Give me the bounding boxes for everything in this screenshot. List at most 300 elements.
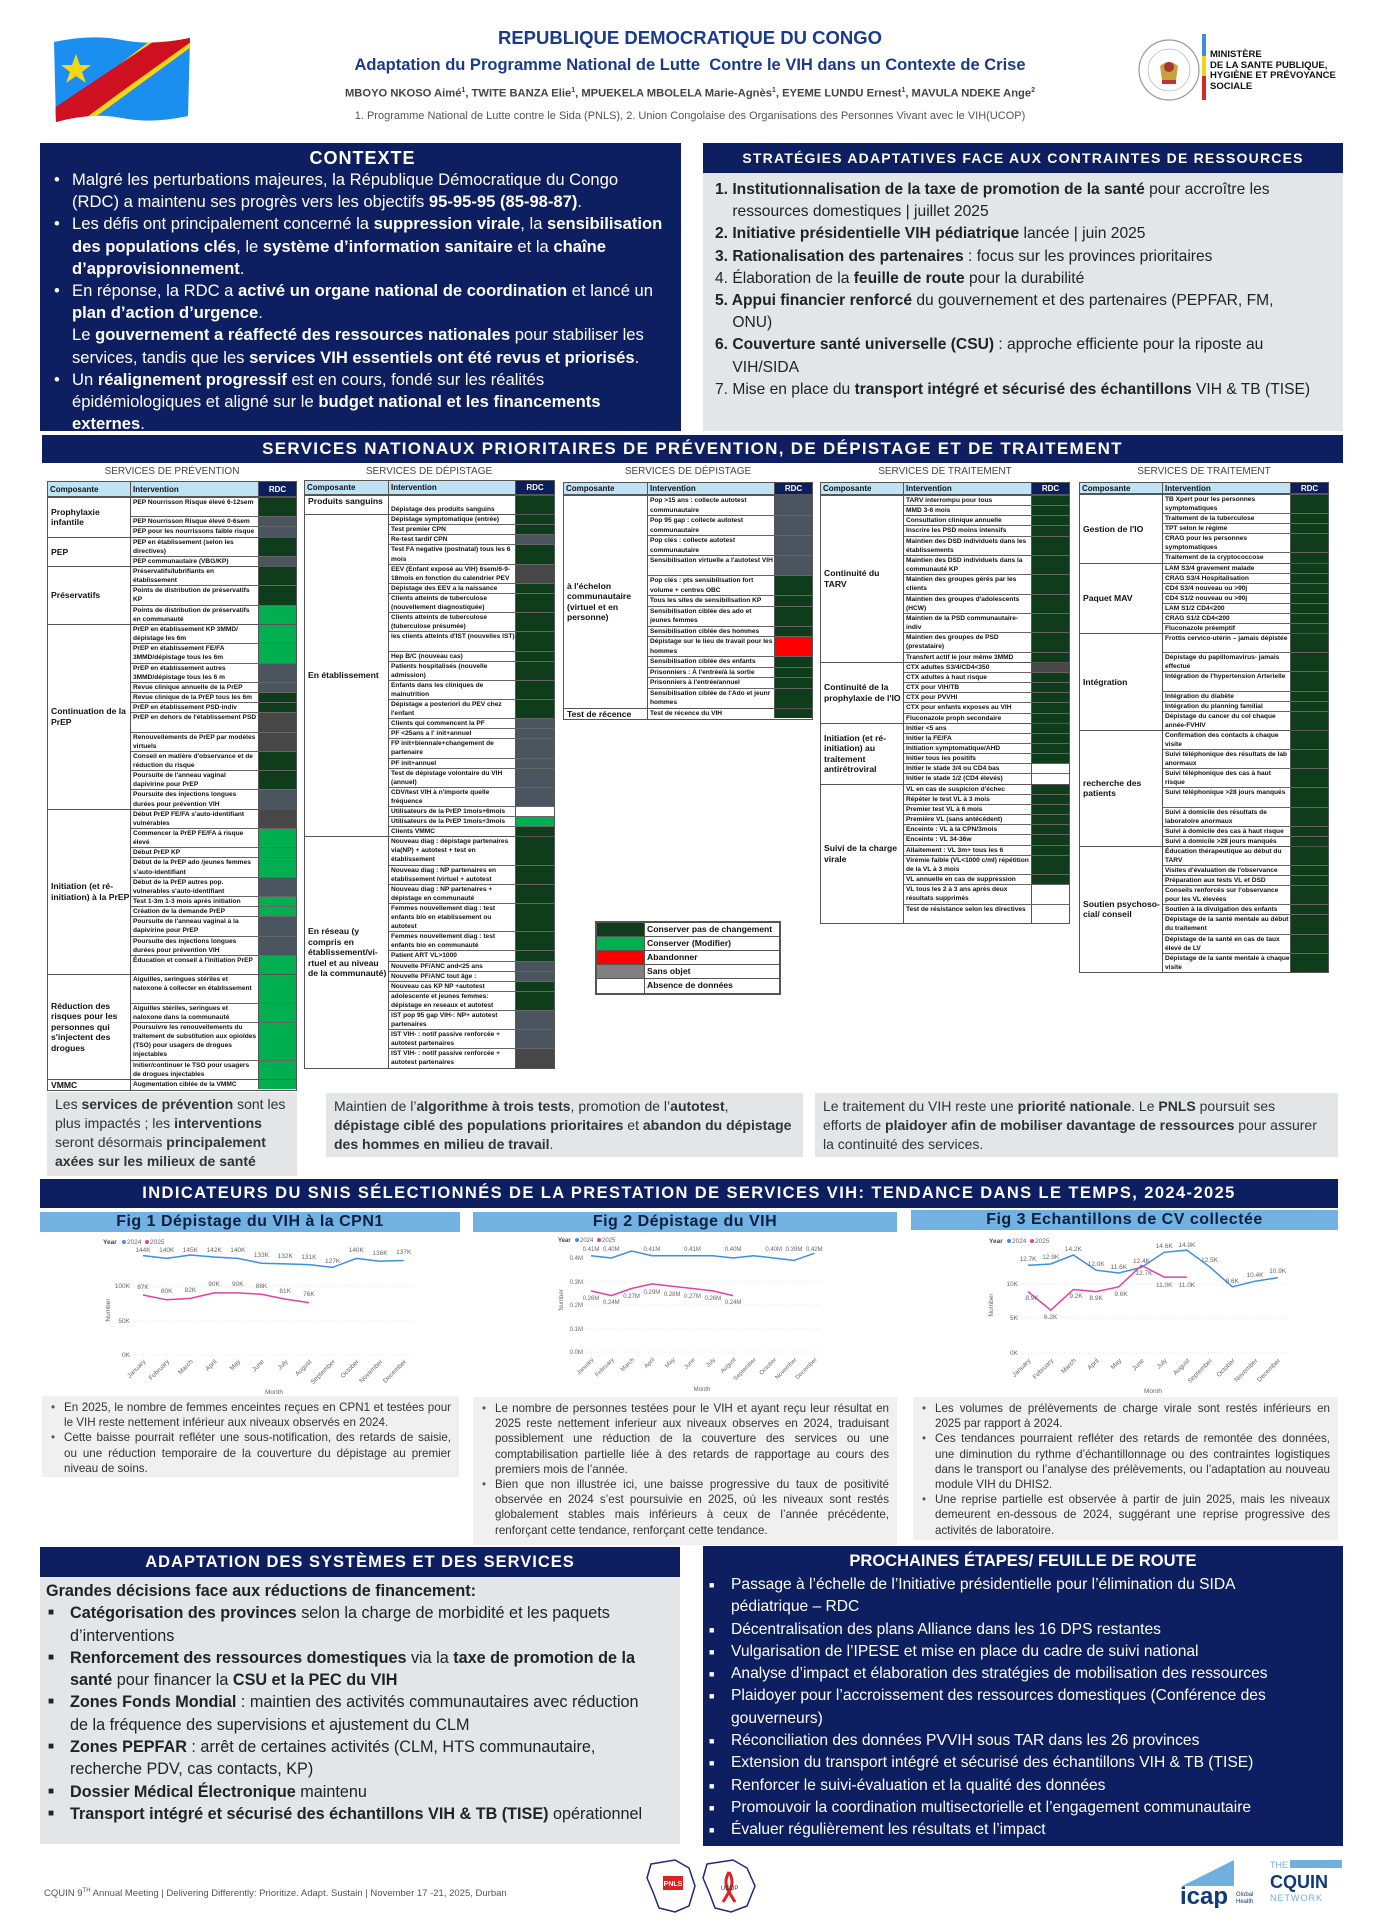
panel: prochaines etapes: ■ <box>709 1781 714 1791</box>
panel: prochaines etapes: ■ <box>709 1825 714 1835</box>
table: depistage 1: PF <25ans a l' init+annuel <box>391 730 471 737</box>
heading: adaptation: ADAPTATION DES SYSTÈMES ET DES SERVICES <box>145 1553 575 1571</box>
table: traitement 2: Suivi à domicile des résultats de laboratoire anormaux <box>1165 808 1267 825</box>
table: traitement 2: TB Xpert pour les personnes symptomatiques <box>1165 496 1255 512</box>
chart: fig 1: Number <box>105 1298 112 1322</box>
table: traitement 2 <box>1079 482 1329 973</box>
text block: fig 3 notes <box>913 1397 1338 1540</box>
table: depistage 1: Clients atteints de tuberculose (nouvellement diagnostiquée) <box>391 595 487 611</box>
table: traitement 1: Enceinte : VL 34-36w <box>906 836 971 843</box>
chart: fig 2: September <box>733 1357 758 1382</box>
table: traitement 1: Virémie faible (VL<1000 c/ml) répétition de la VL à 3 mois <box>906 857 1029 873</box>
chart: fig 3: 2024 <box>1012 1238 1027 1245</box>
panel: adaptation des systemes: ■ <box>48 1741 54 1752</box>
table: depistage 1: En établissement <box>308 670 379 680</box>
panel: adaptation des systemes: ■ <box>48 1696 54 1707</box>
panel: contexte: • <box>54 370 60 389</box>
table: prevention: PrEP en établissement FE/FA 3MMD/dépistage tous les 6m <box>133 645 224 661</box>
chart: fig 1: June <box>251 1358 266 1373</box>
chart: fig 2: 0.1M <box>570 1327 583 1333</box>
chart: fig 2: 0.27M <box>623 1294 640 1300</box>
table: depistage 2: Test de récence <box>567 708 631 718</box>
panel: prochaines etapes: ■ <box>709 1625 714 1635</box>
table: depistage 1: Femmes nouvellement diag : test enfants bio en communauté <box>391 933 495 949</box>
panel: contexte: plan d’action d’urgence. <box>72 303 263 322</box>
chart: fig 2: 0.26M <box>704 1296 721 1302</box>
table: depistage 2: Pop clés : pts sensibilisation fort volume + centres OBC <box>650 577 753 594</box>
table: depistage 1: En réseau (y compris en établisse­ment/vi­rtuel et au niveau de la communauté) <box>308 926 386 978</box>
footer text: CQUIN 9TH Annual Meeting | Delivering Differently: Prioritize. Adapt. Sustain | November 17 -21, 2025, Durban <box>44 1888 507 1899</box>
chart: fig 3: 12.5K <box>1201 1257 1219 1264</box>
panel: strategies: 1. Institutionnalisation de la taxe de promotion de la santé pour accroître les <box>715 181 1270 198</box>
chart: fig 3: 9.6K <box>1226 1278 1240 1285</box>
heading: fig 2 <box>473 1212 897 1232</box>
panel: adaptation des systemes: Renforcement des ressources domestiques via la taxe de promotion de la <box>70 1649 635 1667</box>
table: prevention: PEP <box>51 547 68 557</box>
table: traitement 2: Suivi à domicile >28 jours manqués <box>1165 838 1277 845</box>
text block: depistage summary <box>326 1093 803 1157</box>
chart: fig 3: 5K <box>1010 1315 1019 1322</box>
table: traitement 2: Suivi téléphonique >28 jours manqués <box>1165 789 1285 796</box>
panel: adaptation des systemes: santé pour financer la CSU et la PEC du VIH <box>70 1671 397 1689</box>
table: depistage 1: Patients hospitalisés (nouvelle admission) <box>391 663 487 679</box>
panel: adaptation des systemes: ■ <box>48 1652 54 1663</box>
text block: traitement summary <box>815 1093 1338 1157</box>
panel: contexte: • <box>54 214 60 233</box>
chart: fig 2: November <box>775 1357 798 1381</box>
panel: adaptation des systemes <box>40 1547 680 1844</box>
panel: adaptation des systemes: ■ <box>48 1786 54 1797</box>
icon: ministry logo: MINISTÈRE <box>1210 49 1262 60</box>
chart: fig 1: 2024 <box>127 1239 142 1246</box>
chart: fig 1: October <box>339 1358 361 1380</box>
chart: fig 1: 2025 <box>150 1239 165 1246</box>
table: depistage 2: Intervention <box>650 484 696 493</box>
text block: prevention summary: axées sur les milieux de santé <box>55 1153 256 1169</box>
chart: fig 1: 137K <box>396 1249 412 1256</box>
table: traitement 1: Répéter le test VL à 3 mois <box>906 796 990 803</box>
table: traitement 2: LAM S1/2 CD4<200 <box>1165 605 1225 612</box>
table: prevention: PEP Nourrisson Risque élevé 0-6sem <box>133 518 250 525</box>
table: traitement 2: Suivi téléphonique des cas à haut risque <box>1165 770 1271 786</box>
table: traitement 1: Inscrire les PSD moins intensifs <box>906 527 1006 534</box>
table: depistage 2: Pop >15 ans : collecte autotest communautaire <box>650 497 747 514</box>
text block: fig 1 notes <box>42 1396 459 1477</box>
table: prevention: Début PrEP FE/FA s'auto-identifiant vulnérables <box>133 811 244 827</box>
table: traitement 1: Suivi de la charge virale <box>824 843 897 864</box>
table: depistage 1: les clients atteints d'IST (nouvelles IST) <box>391 633 515 640</box>
chart: fig 1: December <box>382 1358 409 1385</box>
table: depistage 1: Nouveau cas KP NP +autotest <box>391 983 485 990</box>
table: prevention: PEP en établissement (selon les directives) <box>133 539 234 555</box>
chart: fig 2: January <box>576 1357 595 1377</box>
table: depistage 1: IST VIH- : notif passive renforcée + autotest partenaires <box>391 1050 500 1066</box>
chart: fig 3: 9.2K <box>1069 1293 1083 1300</box>
table: traitement 2: CRAG S1/2 CD4<200 <box>1165 615 1230 622</box>
chart: fig 3: 14.2K <box>1065 1246 1083 1253</box>
table: depistage 2: Sensibilisation ciblée des hommes <box>650 628 759 634</box>
table: prevention: Poursuite de l'anneau vaginal dapivirine pour PrEP <box>133 772 226 788</box>
table: depistage 2: Tous les sites de sensibilisation KP <box>650 597 761 604</box>
table: prevention <box>47 481 297 1091</box>
table: depistage 1: Test FA negative (postnatal) tous les 6 mois <box>391 546 510 563</box>
chart: fig 1: 90K <box>208 1281 221 1288</box>
table: depistage 1: Test premier CPN <box>391 526 446 533</box>
chart: fig 3: 11.0K <box>1156 1282 1173 1289</box>
table: prevention: Poursuite des injections longues durées pour prévention VIH <box>133 791 236 808</box>
table: traitement 1: Maintien des groupes de PSD (prestataire) <box>906 634 999 650</box>
table: depistage 1: Produits sanguins <box>308 496 383 506</box>
chart: fig 3: 10.4K <box>1246 1272 1264 1279</box>
icon: icap and cquin logos: Global <box>1236 1892 1253 1898</box>
table: traitement 2: LAM S3/4 gravement malade <box>1165 565 1254 572</box>
table: prevention: Début de la PrEP autres pop. vulnerables s'auto-identifiant <box>133 879 224 895</box>
chart: fig 3: Year <box>989 1238 1003 1245</box>
table: traitement 2: CD4 S1/2 nouveau ou >90j <box>1165 595 1247 602</box>
table: prevention: Initiation (et ré-initiation) à la PrEP <box>51 881 129 902</box>
table: prevention: Poursuite des injections longues durées pour prévention VIH <box>133 938 236 954</box>
chart: fig 3: January <box>1011 1357 1033 1379</box>
heading: fig 1: Fig 1 Dépistage du VIH à la CPN1 <box>116 1213 384 1230</box>
table: depistage 2: Pop clés : collecte autotest communautaire <box>650 537 735 554</box>
table: depistage 1: Test de dépistage volontaire du VIH (annuel) <box>391 770 502 786</box>
chart: fig 2 <box>558 1238 823 1393</box>
table: depistage 1: adolescente et jeunes femmes: dépistage en reseaux et autotest <box>391 993 493 1009</box>
table: depistage 2: Test de récence du VIH <box>650 710 722 716</box>
heading: contexte: CONTEXTE <box>309 148 416 168</box>
chart: fig 1: April <box>204 1358 219 1373</box>
table: depistage 1: RDC <box>526 483 544 492</box>
table: traitement 2: CRAG pour les personnes symptomatiques <box>1165 535 1247 551</box>
table: depistage 1: Nouvelle PF/ANC and<25 ans <box>391 963 483 970</box>
table: traitement 1: Initier le stade 3/4 ou CD4 bas <box>906 765 999 772</box>
table: prevention: Poursuite de l'anneau vaginal à la dapivirine pour PrEP <box>133 918 239 934</box>
title: 1. Programme National de Lutte contre le Sida (PNLS), 2. Union Congolaise des Organisations des Personnes Vivant avec le VIH(UCOP) <box>355 110 1025 122</box>
chart: fig 2: 0.26M <box>583 1296 599 1302</box>
panel: contexte: • <box>54 281 60 300</box>
table: traitement 2: Confirmation des contacts à chaque visite <box>1165 732 1279 748</box>
chart: fig 1 <box>103 1239 415 1396</box>
text block: traitement summary: Le traitement du VIH reste une priorité nationale. Le PNLS poursuit ses <box>823 1098 1275 1114</box>
chart: fig 3: November <box>1233 1357 1260 1384</box>
table: depistage 2: Sensibilisation ciblée des enfants <box>650 658 756 665</box>
chart: fig 1: March <box>177 1358 195 1376</box>
chart: fig 3 <box>988 1238 1288 1395</box>
table: prevention: Réduction des risques pour les personnes qui s'injectent des drogues <box>51 1001 117 1053</box>
table: prevention: Renouvellements de PrEP par modèles virtuels <box>133 734 255 750</box>
table: traitement 1: VL en cas de suspicion d'échec <box>906 786 1005 793</box>
table: depistage 2: Sensibilisation ciblée des ado et jeunes femmes <box>650 608 752 624</box>
panel: contexte: • <box>54 170 60 189</box>
legend: Sans objet <box>647 966 690 976</box>
title <box>345 27 1035 122</box>
chart: fig 2: 0.3M <box>570 1280 583 1286</box>
chart: fig 3: 8.9K <box>1025 1295 1039 1302</box>
chart: fig 2: 0.41M <box>583 1247 599 1253</box>
legend: Abandonner <box>647 952 698 962</box>
heading: services de prevention: SERVICES DE PRÉVENTION <box>105 466 239 477</box>
text block: fig 3 notes: Une reprise partielle est observée à partir de juin 2025, mais les niveaux demeurent en-dessous de 2024, suggérant une reprise progressive des activités de laboratoire. <box>935 1493 1330 1537</box>
table: prevention: Prophylaxie infantile <box>51 507 100 527</box>
chart: fig 1: 0K <box>122 1352 131 1359</box>
table: traitement 1: Premier test VL à 6 mois <box>906 806 982 813</box>
chart: fig 3: 12.9K <box>1042 1254 1060 1261</box>
chart: fig 2: 0.24M <box>603 1300 620 1306</box>
chart: fig 1: 140K <box>349 1247 365 1254</box>
chart: fig 3: 12.7K <box>1020 1256 1037 1263</box>
panel: strategies: 7. Mise en place du transport intégré et sécurisé des échantillons VIH & TB (TISE) <box>715 381 1310 398</box>
table: prevention: PrEP en établissement autres 3MMD/dépistage tous les 6 m <box>133 664 226 681</box>
table: depistage 1: IST pop 95 gap VIH-: NP+ autotest partenaires <box>391 1012 497 1028</box>
title: Adaptation du Programme National de Lutte Contre le VIH dans un Contexte de Crise <box>354 56 1026 74</box>
table: prevention: Conseil en matière d'observance et de réduction du risque <box>133 753 253 769</box>
table: traitement 2: Dépistage de la santé en cas de taux élevé de LV <box>1165 936 1280 952</box>
heading: fig 3 <box>911 1210 1338 1230</box>
table: depistage 2: Prisonniers à l'entrée/annuel <box>650 679 740 686</box>
table: traitement 1: CTX adultes à haut risque <box>906 674 987 681</box>
chart: fig 3: March <box>1060 1357 1078 1375</box>
panel: prochaines etapes: ■ <box>709 1647 714 1657</box>
chart: fig 1: 132K <box>278 1253 293 1260</box>
chart: fig 2: 2024 <box>580 1238 594 1244</box>
table: traitement 1: Continuité du TARV <box>824 568 879 589</box>
chart: fig 2: 0.0M <box>570 1350 583 1356</box>
panel: prochaines etapes: Réconciliation des données PVVIH sous TAR dans les 26 provinces <box>731 1732 1199 1749</box>
chart: fig 2: 2025 <box>602 1238 616 1244</box>
chart: fig 1: 136K <box>372 1250 388 1257</box>
panel: prochaines etapes: Vulgarisation de l’IPESE et mise en place du cadre de suivi national <box>731 1643 1199 1660</box>
table: prevention: PEP pour les nourrissons faible risque <box>133 528 254 535</box>
chart: fig 1: Year <box>103 1239 117 1246</box>
table: traitement 2: CRAG S3/4 Hospitalisation <box>1165 575 1249 582</box>
panel: adaptation des systemes: ■ <box>48 1808 54 1819</box>
chart: fig 2: April <box>644 1357 656 1370</box>
table: depistage 1: Femmes nouvellement diag : test enfants bio en etablissement ou autotest <box>391 905 495 930</box>
table: traitement 1: Fluconazole proph secondaire <box>906 715 1001 722</box>
panel: prochaines etapes: Analyse d’impact et élaboration des stratégies de mobilisation des ressources <box>731 1665 1268 1682</box>
chart: fig 2: Number <box>559 1289 565 1311</box>
table: traitement 1: Continuité de la prophylaxie de l'IO <box>824 682 901 703</box>
table: depistage 1: Nouveau diag : dépistage partenaires via(NP) + autotest + test en établissement <box>391 838 508 863</box>
legend: Absence de données <box>647 980 733 990</box>
chart: fig 3: 10K <box>1006 1281 1019 1288</box>
panel: prochaines etapes: ■ <box>709 1580 714 1590</box>
table: traitement 2: Traitement de la cryptococcose <box>1165 554 1264 561</box>
table: traitement 2: recherche des patients <box>1083 778 1141 798</box>
table: depistage 1: Intervention <box>391 483 437 492</box>
chart: fig 3: 2025 <box>1035 1238 1050 1245</box>
chart: fig 2: August <box>720 1357 738 1375</box>
table: prevention: Poursuivre les renouvellements du traitement de substitution aux opioïdes (TSO) pour usagers de drogues injectables <box>133 1024 256 1058</box>
table: prevention: Points de distribution de préservatifs en communauté <box>133 607 250 623</box>
table: traitement 1: CTX pour PVVHI <box>906 694 957 701</box>
heading: services de depistage 1: SERVICES DE DÉPISTAGE <box>366 466 492 477</box>
chart: fig 3: 11.6K <box>1111 1264 1128 1271</box>
panel: contexte: services, tandis que les services VIH essentiels ont été revus et priorisés. <box>72 348 639 367</box>
panel: prochaines etapes: ■ <box>709 1758 714 1768</box>
text block: fig 3 notes: Ces tendances pourraient refléter des retards de remontée des données, une diminution du rythme d’échantillonnage ou des contraintes logistiques dans le transport ou l’analyse des prélèvements, ou l’adaptation au nouveau module VIH du DHIS2. <box>935 1432 1330 1491</box>
table: traitement 2: Dépistage de la santé mentale à chaque visite <box>1165 955 1290 971</box>
chart: fig 2: February <box>594 1357 616 1378</box>
chart: fig 1: July <box>276 1358 290 1372</box>
chart: fig 2: October <box>759 1357 778 1377</box>
panel: prochaines etapes: Évaluer régulièrement les résultats et l’impact <box>731 1821 1046 1838</box>
table: prevention: Revue clinique annuelle de la PrEP <box>133 684 243 691</box>
table: depistage 1 <box>304 480 555 1069</box>
table: prevention: Revue clinique de la PrEP tous les 6m <box>133 694 252 701</box>
chart: fig 3: 10.9K <box>1269 1268 1287 1275</box>
text block: depistage summary: Maintien de l’algorithme à trois tests, promotion de l’autotest, <box>334 1098 728 1114</box>
table: depistage 1: CDV/test VIH à n'importe quelle fréquence <box>391 789 489 805</box>
chart: fig 1: 127K <box>325 1258 341 1265</box>
title: REPUBLIQUE DEMOCRATIQUE DU CONGO <box>498 27 882 48</box>
heading: services de traitement 1: SERVICES DE TRAITEMENT <box>878 466 1012 477</box>
table: traitement 2: Composante <box>1082 484 1130 492</box>
chart: fig 1: September <box>310 1358 338 1386</box>
heading: services nationaux banner: SERVICES NATIONAUX PRIORITAIRES DE PRÉVENTION, DE DÉPISTAGE ET DE TRAITEMENT <box>262 439 1123 458</box>
table: prevention: RDC <box>269 484 286 494</box>
chart: fig 1: August <box>294 1358 313 1378</box>
chart: fig 3: 12.0K <box>1088 1261 1105 1268</box>
table: prevention: Continuation de la PrEP <box>51 706 126 727</box>
table: prevention: Création de la demande PrEP <box>133 908 225 915</box>
panel: contexte: Le gouvernement a réaffecté des ressources nationales pour stabiliser les <box>72 325 644 344</box>
chart: fig 2: 0.27M <box>684 1294 701 1300</box>
table: depistage 1: IST VIH- : notif passive renforcée + autotest partenaires <box>391 1031 500 1047</box>
table: traitement 1: Maintien des groupes d'adolescents (HCW) <box>906 596 1019 612</box>
panel: adaptation des systemes: Zones PEPFAR : arrêt de certaines activités (CLM, HTS communautaire, <box>70 1738 595 1756</box>
chart: fig 2: 0.4M <box>570 1256 583 1262</box>
chart: fig 1: 131K <box>301 1254 317 1261</box>
table: depistage 2: Prisonniers : À l'entrée/à la sortie <box>650 668 755 676</box>
panel: adaptation des systemes: d’interventions <box>70 1627 174 1645</box>
chart: fig 2: 0.41M <box>644 1247 660 1253</box>
table: traitement 2: RDC <box>1301 484 1318 492</box>
table: traitement 2: Dépistage du cancer du col chaque année-FVHIV <box>1165 713 1276 729</box>
text block: fig 1 notes: En 2025, le nombre de femmes enceintes reçues en CPN1 et testées pour le VIH reste nettement inférieur aux niveaux observés en 2024. <box>64 1401 451 1429</box>
panel: contexte: Les défis ont principalement concerné la suppression virale, la sensibilisation <box>72 214 662 233</box>
table: traitement 2: Conseils renforcés sur l'observance pour les VL élevées <box>1165 887 1278 903</box>
chart: fig 3: June <box>1131 1357 1146 1372</box>
table: depistage 1: Clients atteints de tuberculose (tuberculose présumée) <box>391 614 487 630</box>
panel: prochaines etapes: Décentralisation des plans Alliance dans les 16 DPS restantes <box>731 1621 1161 1638</box>
panel: contexte: externes. <box>72 414 145 433</box>
chart: fig 2: May <box>664 1357 677 1369</box>
heading: fig 2: Fig 2 Dépistage du VIH <box>593 1213 777 1230</box>
legend <box>595 921 781 995</box>
table: prevention: Test 1-3m 1-3 mois après initiation <box>133 898 241 905</box>
table: traitement 1: Maintien de la PSD communautaire-indiv <box>906 615 1018 631</box>
text block: fig 1 notes: Cette baisse pourrait refléter une sous-notification, des retards de saisie, ou une réduction temporaire de la couverture du dépistage au premier niveau de soins. <box>64 1431 451 1475</box>
chart: fig 1: 142K <box>207 1247 222 1254</box>
table: prevention: Éducation et conseil à l'initiation PrEP <box>133 957 253 964</box>
heading: services de depistage 2: SERVICES DE DÉPISTAGE <box>625 466 751 477</box>
table: depistage 1: Re-test tardif CPN <box>391 536 447 543</box>
icon: ministry logo: HYGIÈNE ET PRÉVOYANCE <box>1210 70 1336 81</box>
table: depistage 1: Nouveau diag : NP partenaires en etablissement /virtuel + autotest <box>391 867 496 883</box>
icon: ministry logo <box>1138 34 1336 101</box>
heading: indicateurs banner: INDICATEURS DU SNIS SÉLECTIONNÉS DE LA PRESTATION DE SERVICES VIH: TENDANCE DANS LE TEMPS, 2024-2025 <box>142 1184 1236 1202</box>
icon: ministry logo: DE LA SANTE PUBLIQUE, <box>1210 60 1327 70</box>
table: traitement 1: Composante <box>823 484 871 493</box>
panel: prochaines etapes: Plaidoyer pour l’accroissement des ressources domestiques (Conférence des <box>731 1687 1266 1704</box>
icon: DRC flag <box>54 37 190 122</box>
table: depistage 1: Composante <box>307 483 355 492</box>
chart: fig 2: 0.41M <box>684 1247 701 1253</box>
panel: prochaines etapes: pédiatrique – RDC <box>731 1598 859 1615</box>
text block: traitement summary: efforts de plaidoyer afin de mobiliser davantage de ressources pour assurer <box>823 1117 1317 1133</box>
table: depistage 1: Enfants dans les cliniques de malnutrition <box>391 682 483 698</box>
table: prevention: Augmentation ciblée de la VMMC <box>133 1081 237 1088</box>
panel: prochaines etapes: ■ <box>709 1736 714 1746</box>
table: prevention: PEP communautaire (VBG/KP) <box>133 558 229 565</box>
charts <box>103 1238 1287 1395</box>
table: traitement 1: RDC <box>1042 484 1059 493</box>
table: prevention: Initier/continuer le TSO pour usagers de drogues injectables <box>133 1062 249 1078</box>
table: traitement 1: Initier la FE/FA <box>906 735 952 742</box>
table: depistage 1: Dépistage symptomatique (entrée) <box>391 516 499 523</box>
icon: icap and cquin logos: NETWORK <box>1270 1893 1323 1903</box>
title: MBOYO NKOSO Aimé1, TWITE BANZA Elie1, MPUEKELA MBOLELA Marie-Agnès1, EYEME LUNDU Ernest1, MAVULA NDEKE Ange2 <box>345 87 1035 100</box>
table: depistage 2: Sensibilisation ciblée de l'Ado et jeunr hommes <box>650 690 770 706</box>
chart: fig 2: 0.29M <box>644 1290 660 1296</box>
chart: fig 1: 100K <box>115 1283 131 1290</box>
table: traitement 2: Dépistage du papillomavirus- jamais effectué <box>1165 654 1279 670</box>
table: traitement 2: Suivi à domicile des cas à haut risque <box>1165 828 1284 835</box>
chart: fig 1: 88K <box>256 1283 268 1290</box>
table: traitement 1: Maintien des DSD individuels dans la communauté KP <box>906 557 1023 573</box>
table: depistage 2: RDC <box>785 484 802 493</box>
chart: fig 3: 9.6K <box>1114 1291 1128 1298</box>
panel: strategies: 5. Appui financier renforcé du gouvernement et des partenaires (PEPFAR, FM, <box>715 292 1273 309</box>
chart: fig 2: 0.24M <box>725 1300 741 1306</box>
chart: fig 3: February <box>1032 1357 1056 1381</box>
table: traitement 1: Consultation clinique annuelle <box>906 517 1002 524</box>
table: traitement 2: Dépistage de la santé mentale au début du traitement <box>1165 916 1288 932</box>
chart: fig 3: May <box>1110 1357 1124 1371</box>
table: traitement 2: Préparation aux tests VL et DSD <box>1165 877 1266 884</box>
heading: strategies <box>703 143 1343 173</box>
panel: contexte: épidémiologiques et aligné sur le budget national et les financements <box>72 392 600 411</box>
chart: fig 3: 14.9K <box>1178 1242 1196 1249</box>
icon: partner logos PNLS and UCOP: UCOP <box>721 1886 738 1892</box>
table: depistage 1: Clients VMMC <box>391 828 435 835</box>
heading: adaptation <box>40 1547 680 1577</box>
table: traitement 1: CTX pour enfants exposes au VIH <box>906 704 1012 711</box>
table: traitement 2: Intégration du diabète <box>1165 693 1234 700</box>
chart: fig 1: January <box>126 1358 148 1380</box>
chart: fig 3: 12.7K <box>1136 1270 1153 1277</box>
table: traitement 1 <box>820 482 1070 924</box>
table: traitement 1: MMD 3-6 mois <box>906 507 950 514</box>
table: prevention: Aiguilles stériles, seringues et naloxone dans la communauté <box>133 1005 229 1021</box>
chart: fig 2: 0.42M <box>806 1247 823 1253</box>
table: prevention: Préservatifs <box>51 590 100 600</box>
chart: fig 2: 0.40M <box>725 1247 741 1253</box>
table: depistage 1: PF init+annuel <box>391 760 436 767</box>
chart: fig 1: February <box>148 1358 172 1382</box>
chart: fig 3: 11.0K <box>1179 1282 1196 1289</box>
icon: icap and cquin logos: Health <box>1236 1899 1253 1905</box>
panel: strategies: ONU) <box>732 314 772 331</box>
panel: strategies: VIH/SIDA <box>732 359 799 376</box>
table: traitement 1: VL tous les 2 à 3 ans après deux résultats supprimés <box>906 886 1007 902</box>
chart: fig 1: 80K <box>161 1288 173 1295</box>
chart: fig 2: 0.2M <box>570 1303 583 1309</box>
table: depistage 1: Dépistage a posteriori du PEV chez l'enfant <box>391 701 502 717</box>
panel: adaptation des systemes: Grandes décisions face aux réductions de financement: <box>46 1582 476 1600</box>
table: traitement 2: Frottis cervico-utérin – jamais dépistée <box>1165 635 1287 642</box>
